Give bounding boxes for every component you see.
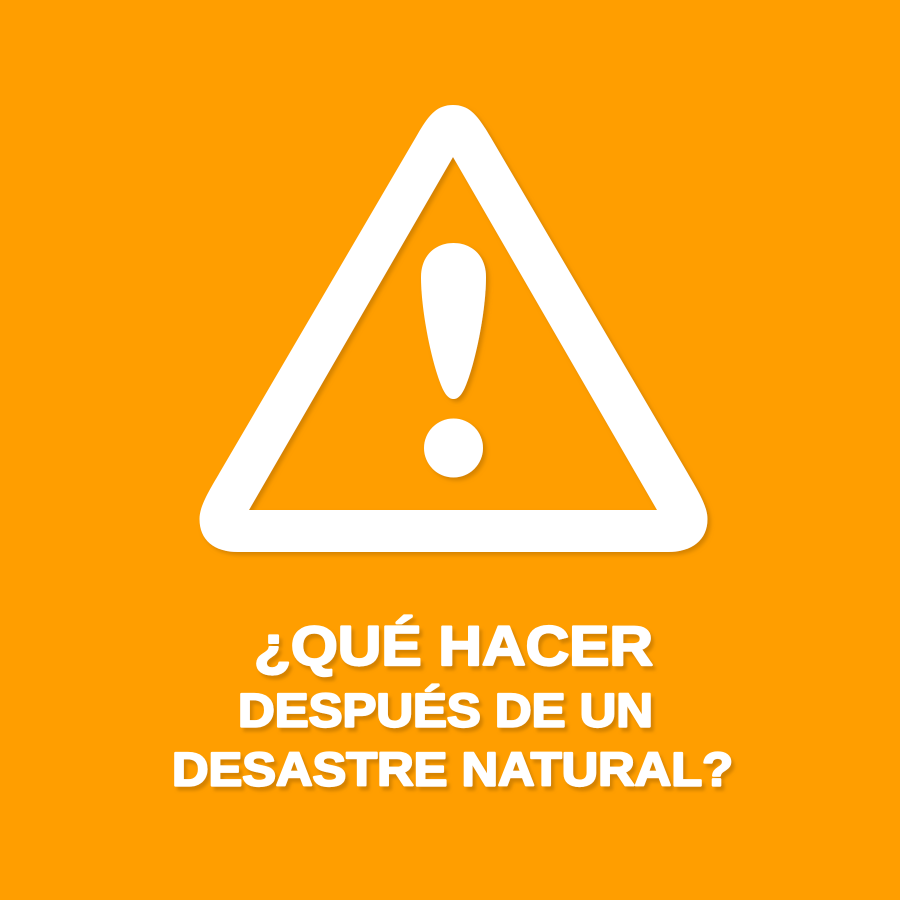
triangle outline: [200, 105, 708, 552]
title line 3: DESASTRE NATURAL?: [172, 744, 733, 796]
exclamation mark stem: [421, 243, 486, 399]
title line 1: ¿QUÉ HACER: [254, 614, 653, 677]
title line 2: DESPUÉS DE UN: [238, 684, 653, 738]
exclamation mark dot: [424, 418, 483, 478]
title: [172, 614, 733, 796]
icon: warning triangle: [200, 105, 708, 552]
